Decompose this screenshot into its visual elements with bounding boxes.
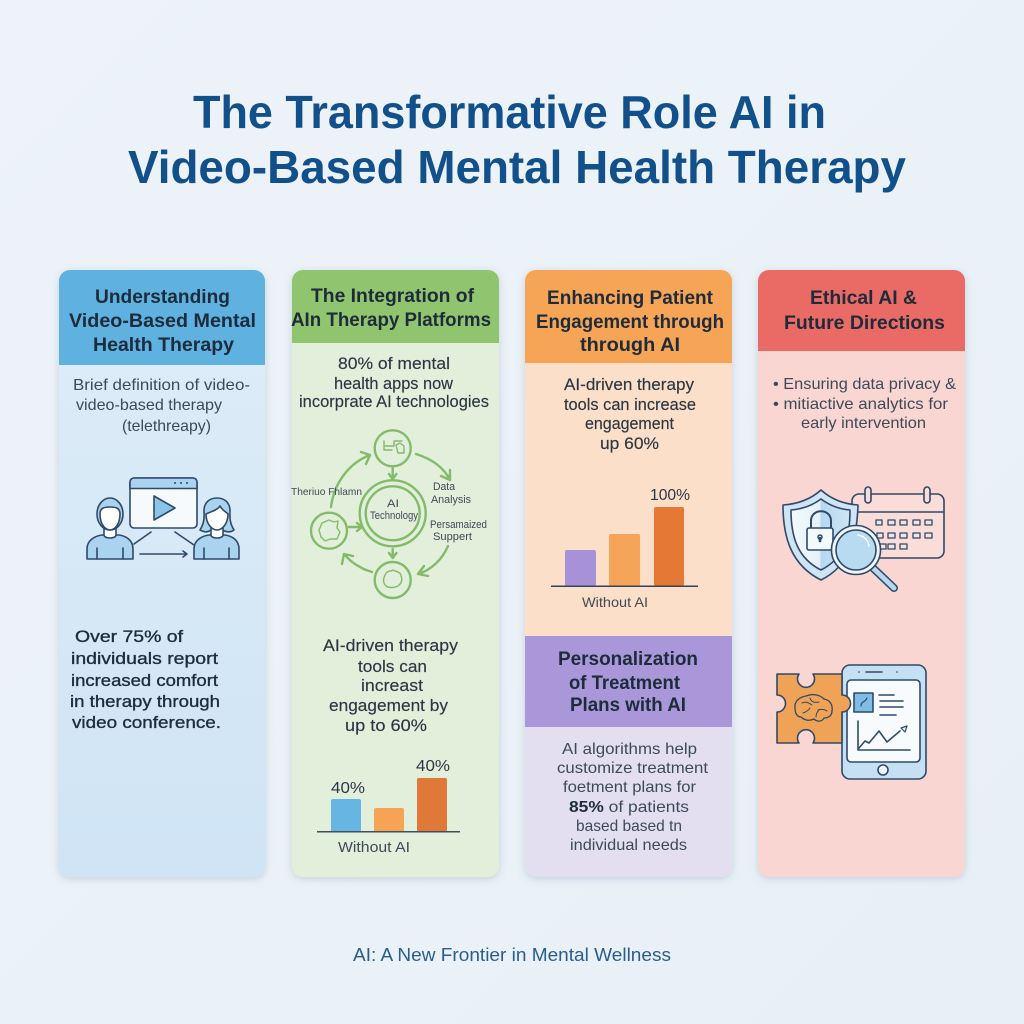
- label: Data Analysis: Analysis: [431, 494, 471, 506]
- statistic: engagement: increast: [361, 677, 423, 695]
- label: Data Analysis: Data: [433, 481, 456, 493]
- heading: patient engagement: [536, 288, 724, 356]
- statistic: 80%: incorprate AI technologies: [299, 393, 489, 411]
- label: Personalized Support: [430, 519, 487, 543]
- statistic: 60% engagement: engagement: [585, 415, 674, 433]
- title: Video-Based Mental Health Therapy: [128, 141, 906, 193]
- bar chart: without AI (orange panel): Without AI: [582, 594, 648, 610]
- statistic: 85% of patients: individual needs: [570, 837, 687, 854]
- heading: patient engagement: Engagement through: [536, 312, 724, 333]
- bar chart: without AI (green panel): [317, 758, 460, 856]
- statistic: 80%: 80% of mental: [338, 355, 450, 373]
- heading: understanding: Understanding: [95, 287, 230, 308]
- heading: integration: The Integration of: [311, 286, 475, 307]
- definition text: (telethreapy): [122, 418, 211, 435]
- definition text: Brief definition of video-: [73, 377, 250, 394]
- statistic: 85% of patients: 85% of patients: [569, 799, 689, 816]
- bar chart: without AI (green panel): 40%: [416, 758, 450, 775]
- label: AI Technology: Technology: [370, 510, 418, 522]
- diagram: AI technology cycle: [291, 430, 487, 598]
- statistic: engagement: AI-driven therapy: [323, 637, 459, 655]
- heading: personalization: [558, 649, 698, 716]
- bar chart: without AI (green panel): Without AI: [338, 839, 410, 856]
- label: Data Analysis: [431, 481, 471, 506]
- label: Personalized Support: Persamaized: [430, 519, 487, 531]
- icon: shield, calendar and magnifier: [783, 487, 944, 588]
- bar chart: without AI (green panel): 40%: [331, 780, 365, 797]
- heading: understanding: Health Therapy: [93, 335, 234, 356]
- heading: understanding: Video-Based Mental: [69, 311, 256, 332]
- panel: integration of AI: [291, 270, 499, 877]
- bar chart: without AI (orange panel): [551, 487, 698, 610]
- footer tagline: AI: A New Frontier in Mental Wellness: [353, 945, 671, 965]
- statistic: 75%: in therapy through: [70, 692, 220, 711]
- statistic: 85% of patients: AI algorithms help: [562, 741, 697, 758]
- statistic: 60% engagement: tools can increase: [564, 396, 696, 414]
- statistic: 75%: Over 75% of: [75, 627, 183, 646]
- heading: patient engagement: Enhancing Patient: [547, 288, 714, 309]
- bullet list: • Ensuring data privacy &: [773, 376, 956, 393]
- icon: puzzle piece with brain and tablet chart: [777, 665, 926, 779]
- heading: ethical AI: [784, 288, 945, 334]
- statistic: 75%: video conference.: [72, 713, 221, 732]
- bullet list: [773, 376, 956, 432]
- statistic: 60% engagement: [564, 376, 696, 453]
- statistic: 60% engagement: AI-driven therapy: [564, 376, 695, 394]
- statistic: 85% of patients: [557, 741, 709, 854]
- statistic: engagement: up to 60%: [345, 717, 427, 735]
- statistic: 80%: health apps now: [334, 375, 453, 393]
- bullet list: • mitiactive analytics for: [773, 396, 949, 413]
- label: AI Technology: AI: [387, 498, 399, 510]
- title: The Transformative Role AI in: [193, 86, 826, 138]
- statistic: engagement: engagement by: [329, 697, 449, 715]
- label: AI Technology: [370, 498, 418, 522]
- heading: integration: [291, 286, 491, 331]
- statistic: 75%: individuals report: [71, 649, 218, 668]
- statistic: 85% of patients: based based tn: [576, 818, 682, 835]
- heading: ethical AI: Ethical AI &: [810, 288, 917, 309]
- heading: ethical AI: Future Directions: [784, 313, 945, 334]
- heading: integration: AIn Therapy Platforms: [291, 310, 491, 331]
- heading: personalization: Plans with AI: [570, 695, 686, 716]
- bar chart: without AI (orange panel): 100%: [650, 487, 690, 504]
- title: [128, 86, 906, 193]
- label: Personalized Support: Suppert: [433, 531, 472, 543]
- heading: personalization: Personalization: [558, 649, 698, 670]
- heading: personalization: of Treatment: [569, 673, 681, 694]
- statistic: 85% of patients: customize treatment: [557, 760, 709, 777]
- bullet list: early intervention: [801, 415, 926, 432]
- definition text: [73, 377, 250, 435]
- statistic: 85% of patients: foetment plans for: [563, 779, 697, 796]
- panel: understanding video-based therapy: [59, 270, 265, 877]
- icon: two people on a video call: [87, 478, 239, 559]
- heading: patient engagement: through AI: [580, 335, 680, 356]
- statistic: 75%: increased comfort: [71, 671, 218, 690]
- heading: understanding: [69, 287, 256, 356]
- definition text: video-based therapy: [76, 397, 222, 414]
- label: Therius Fhlamn: Theriuo Fhlamn: [291, 486, 362, 498]
- statistic: engagement: tools can: [358, 658, 427, 676]
- statistic: 60% engagement: up 60%: [600, 435, 659, 453]
- statistic: engagement: [323, 637, 459, 735]
- panel: ethical AI and future directions: [758, 270, 965, 877]
- statistic: 75%: [70, 627, 221, 732]
- statistic: 80%: [299, 355, 489, 411]
- panel: patient engagement and personalization: [525, 270, 732, 877]
